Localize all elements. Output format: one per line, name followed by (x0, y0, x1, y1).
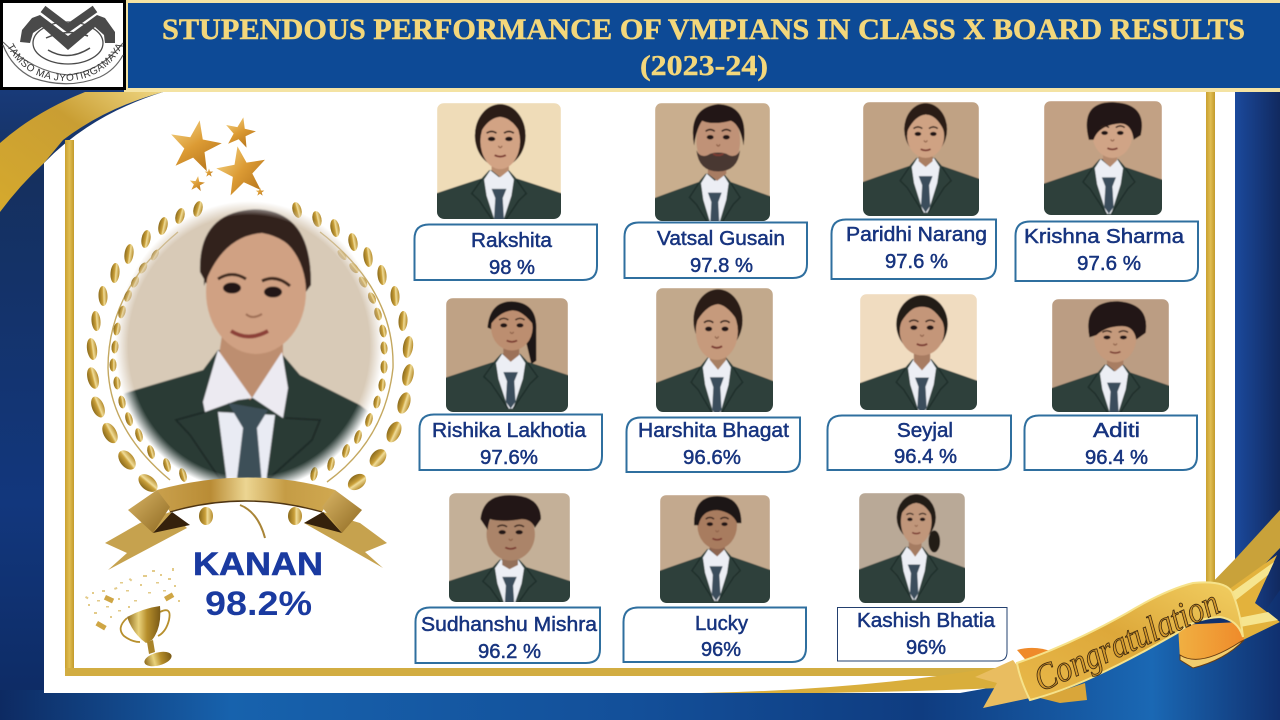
score: 96% (701, 639, 741, 661)
label box (832, 220, 996, 279)
name: Vatsal Gusain (657, 228, 785, 250)
label box (1024, 416, 1197, 470)
score: 96.6% (683, 447, 741, 469)
name: Aditi (1093, 420, 1140, 442)
label box (828, 416, 1011, 470)
gold corner arc (0, 92, 163, 212)
school logo (0, 0, 126, 90)
label box (1016, 222, 1198, 281)
name: Rishika Lakhotia (432, 420, 587, 442)
topper medallion (85, 114, 416, 623)
name: Lucky (695, 613, 748, 635)
photo (1052, 299, 1169, 412)
name: Sudhanshu Mishra (421, 614, 598, 636)
name: Paridhi Narang (846, 224, 987, 246)
blue corner below ribbon (960, 590, 1280, 720)
name: Krishna Sharma (1024, 226, 1185, 248)
student: Rakshita (414, 103, 597, 280)
label box (420, 414, 602, 470)
name: Rakshita (471, 230, 553, 252)
label box (624, 608, 806, 662)
photo (863, 102, 979, 216)
school logo: TAMSO MA JYOTIRGAMAYA (8, 42, 123, 81)
gold frame (65, 92, 1280, 693)
photo (655, 103, 770, 221)
label box (626, 418, 800, 472)
student: Harshita Bhagat (626, 288, 800, 472)
student: Rishika Lakhotia (420, 298, 602, 470)
icon: gold stars (166, 114, 270, 197)
icon: trophy with confetti (85, 568, 180, 669)
score: 96.4 % (1085, 447, 1148, 469)
photo (660, 495, 770, 603)
student: Sudhanshu Mishra (416, 493, 600, 663)
photo (656, 288, 773, 412)
score: 97.6% (480, 447, 538, 469)
name: Seyjal (897, 420, 953, 442)
congratulation ribbon (975, 555, 1280, 708)
score: 97.6 % (1077, 253, 1141, 275)
laurel wreath (85, 200, 416, 495)
label box (624, 222, 807, 278)
score: 96% (906, 637, 946, 659)
photo (437, 103, 561, 219)
title header (124, 0, 1280, 92)
photo (860, 294, 977, 410)
student: Krishna Sharma (1016, 101, 1198, 281)
student: Lucky (624, 495, 806, 662)
photo (446, 298, 568, 412)
gold ribbon banner (105, 478, 387, 570)
score: 97.8 % (690, 255, 753, 277)
score: 96.4 % (894, 446, 957, 468)
student: Paridhi Narang (832, 102, 998, 279)
photo (859, 493, 965, 603)
label box (414, 224, 597, 280)
title line two: (2023-24) (640, 50, 768, 82)
topper name: KANAN (193, 546, 323, 582)
label box (838, 608, 1007, 661)
score: 98 % (489, 257, 535, 279)
student: Kashish Bhatia (838, 493, 1007, 661)
title line one: STUPENDOUS PERFORMANCE OF VMPIANS IN CLASS X BOARD RESULTS (162, 13, 1245, 46)
topper portrait (116, 202, 382, 481)
white panel (44, 92, 1235, 693)
topper score: 98.2% (205, 585, 312, 623)
photo (449, 493, 570, 602)
score: 97.6 % (885, 251, 948, 273)
score: 96.2 % (478, 641, 541, 663)
name: Kashish Bhatia (857, 610, 996, 632)
student: Aditi (1024, 299, 1197, 470)
photo (1044, 101, 1162, 215)
student: Vatsal Gusain (624, 103, 807, 278)
student: Seyjal (828, 294, 1011, 470)
name: Harshita Bhagat (638, 420, 789, 442)
label box (416, 608, 600, 663)
congratulation text: Congratulation (1028, 582, 1226, 700)
